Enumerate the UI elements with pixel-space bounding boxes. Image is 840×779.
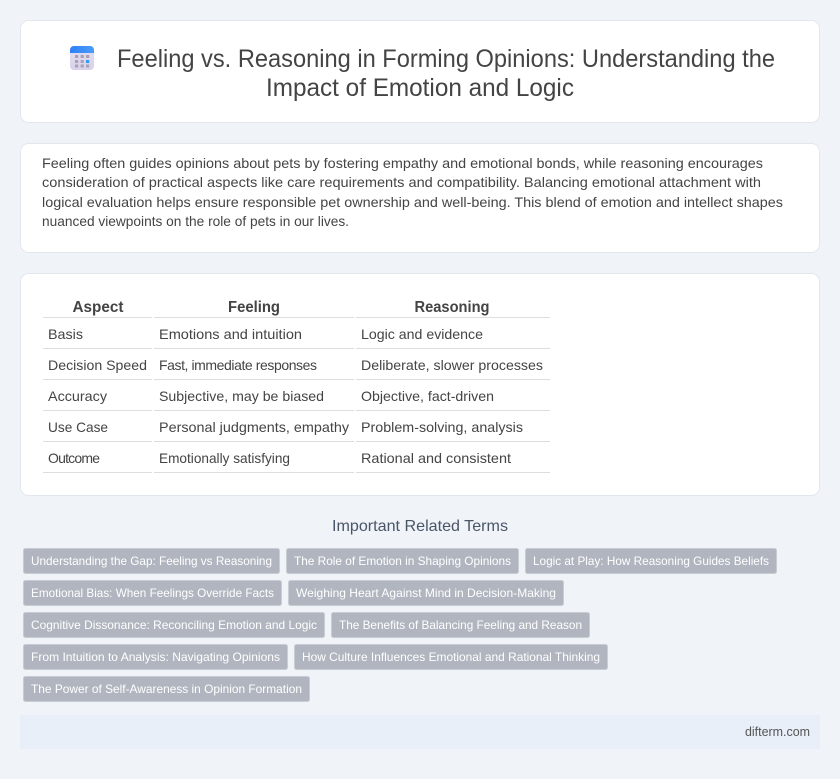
table header <box>72 299 490 316</box>
table rows: Problem-solving, analysis <box>361 419 523 435</box>
related terms tags: From Intuition to Analysis: Navigating Opinions <box>31 650 280 664</box>
related terms tags: Understanding the Gap: Feeling vs Reasoning <box>31 554 272 568</box>
related terms tags: The Benefits of Balancing Feeling and Reason <box>339 618 582 632</box>
table rows: Basis <box>48 326 83 342</box>
related terms tags: Weighing Heart Against Mind in Decision-Making <box>296 586 556 600</box>
header panel <box>20 20 820 122</box>
table rows <box>48 326 543 466</box>
related terms tags: Logic at Play: How Reasoning Guides Beliefs <box>533 554 769 568</box>
table rows: Accuracy <box>48 388 107 404</box>
table rows: Rational and consistent <box>361 450 511 466</box>
related terms tags: The Role of Emotion in Shaping Opinions <box>294 554 511 568</box>
table header: Feeling <box>228 299 280 316</box>
footer credit: difterm.com <box>745 724 810 739</box>
intro paragraph: nuanced viewpoints on the role of pets in our lives. <box>42 213 349 229</box>
table rows: Deliberate, slower processes <box>361 357 543 373</box>
table rows: Fast, immediate responses <box>159 357 317 373</box>
icon: calendar grid <box>70 46 94 70</box>
table rows: Outcome <box>48 450 100 466</box>
table rows: Subjective, may be biased <box>159 388 324 404</box>
table rows: Use Case <box>48 419 108 435</box>
footer bar <box>20 715 820 749</box>
comparison table panel <box>20 274 820 496</box>
table rows: Logic and evidence <box>361 326 483 342</box>
related terms tags: How Culture Influences Emotional and Rational Thinking <box>302 650 600 664</box>
related terms tags <box>24 548 776 702</box>
intro paragraph <box>42 155 783 229</box>
intro paragraph: logical evaluation helps ensure responsible pet ownership and well-being. This blend of emotion and intellect shapes <box>42 194 783 210</box>
table rows: Emotionally satisfying <box>159 450 290 466</box>
related terms tags: Cognitive Dissonance: Reconciling Emotion and Logic <box>31 618 317 632</box>
title: Impact of Emotion and Logic <box>266 74 574 102</box>
related terms tags: The Power of Self-Awareness in Opinion Formation <box>31 682 302 696</box>
title <box>117 45 775 102</box>
intro text panel <box>20 144 820 252</box>
table rows: Decision Speed <box>48 357 147 373</box>
table rows: Objective, fact-driven <box>361 388 494 404</box>
intro paragraph: consideration of practical aspects like care requirements and compatibility. Balancing emotional attachment with <box>42 174 761 190</box>
table header: Reasoning <box>414 299 490 316</box>
related terms heading: Important Related Terms <box>332 518 508 535</box>
table rows: Emotions and intuition <box>159 326 302 342</box>
table header: Aspect <box>72 299 124 316</box>
title: Feeling vs. Reasoning in Forming Opinions: Understanding the <box>117 45 775 73</box>
intro paragraph: Feeling often guides opinions about pets by fostering empathy and emotional bonds, while reasoning encourages <box>42 155 763 171</box>
table rows: Personal judgments, empathy <box>159 419 349 435</box>
related terms tags: Emotional Bias: When Feelings Override Facts <box>31 586 274 600</box>
